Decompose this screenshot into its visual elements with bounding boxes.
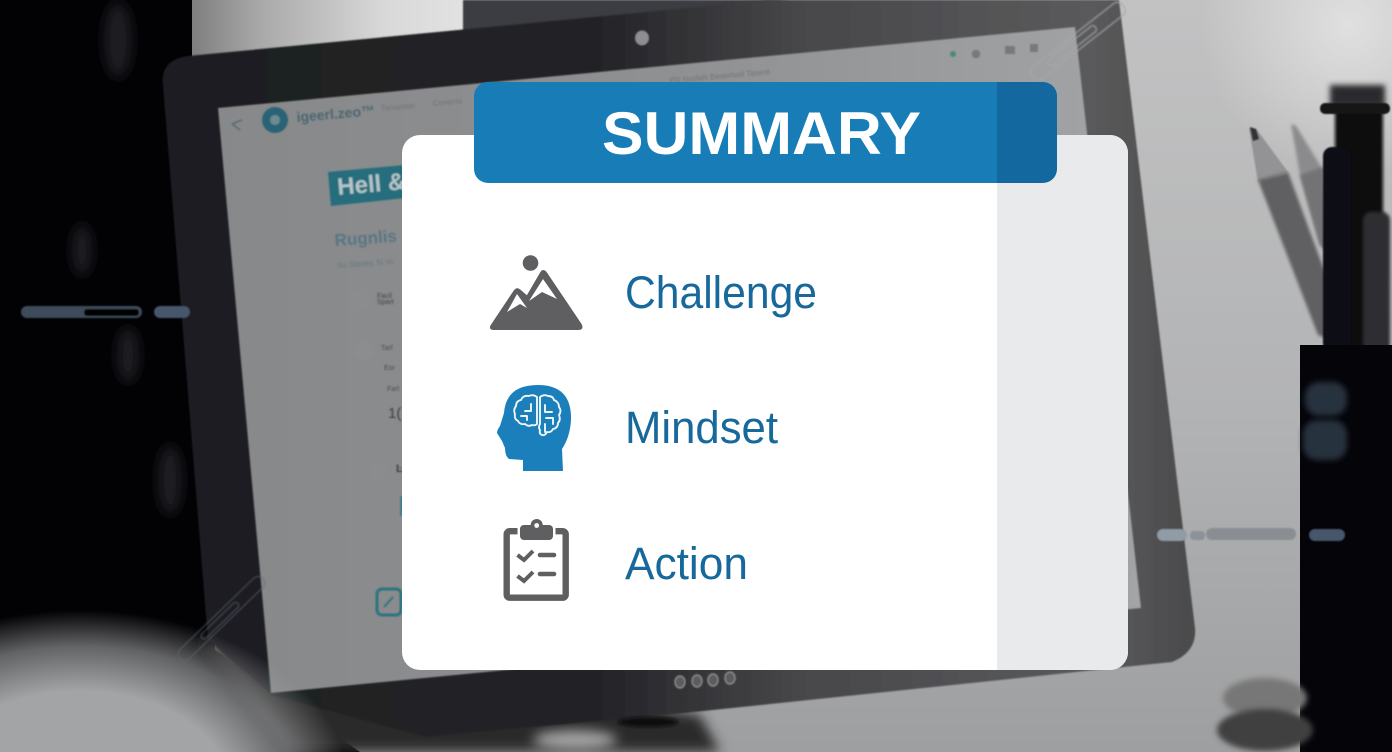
- blurred screen content: Tarf: [381, 345, 393, 352]
- label: mindset: Mindset: [625, 402, 778, 453]
- icon: clipboard checklist: [507, 519, 566, 598]
- blurred cup: [1223, 678, 1307, 718]
- blurred screen content: [232, 44, 1038, 615]
- pencil: front: [1249, 128, 1288, 182]
- heading banner: [474, 82, 1057, 183]
- icon: head with brain: [497, 385, 571, 471]
- blurred screen content: Hell &: [336, 168, 406, 201]
- row: mindset: [497, 385, 778, 471]
- blurred screen content: Eor: [384, 365, 396, 372]
- blurred screen content: igeerl.zeo™: [296, 102, 376, 125]
- tablet bottom buttons: [675, 672, 735, 688]
- decorative pill: right: [1157, 528, 1345, 541]
- tablet body: [163, 0, 1195, 737]
- tablet screen: [218, 27, 1141, 693]
- paperclip: upper right: [1028, 0, 1128, 82]
- decorative pill: left: [21, 306, 190, 318]
- blurred screen content: 1(: [388, 405, 401, 422]
- blurred screen content: Ŀ: [396, 463, 403, 475]
- blurred screen content: Conents: [432, 96, 463, 108]
- label: action: Action: [625, 538, 748, 589]
- label: challenge: Challenge: [625, 267, 817, 318]
- paperclip: lower left: [175, 574, 267, 663]
- blurred screen content: Spart: [377, 299, 394, 306]
- blurred screen content: Rugnlis: [334, 227, 397, 250]
- faint smudges left: [72, 2, 182, 515]
- pencil: back: [1291, 124, 1325, 250]
- desk objects on right: [1217, 85, 1392, 752]
- row: action: [507, 519, 748, 598]
- tablet camera: [635, 30, 649, 46]
- blurred screen content: Tansester: [380, 101, 416, 113]
- pen tubes: [1335, 107, 1383, 352]
- icon: mountain with sun: [490, 255, 582, 330]
- foreground blurred shape lower left: [0, 610, 350, 752]
- blurred screen content: Su Stanes Sl Yo: [337, 257, 395, 270]
- blurred screen content: Facil: [377, 293, 392, 300]
- pen holder: [1300, 345, 1392, 752]
- title: SUMMARY: [602, 100, 921, 167]
- panel: summary card: [402, 135, 1128, 670]
- blurred screen content: Farl: [387, 386, 400, 393]
- blurred screen content: Plz Nodals Beaertool Taseot: [669, 67, 771, 85]
- row: challenge: [490, 255, 817, 330]
